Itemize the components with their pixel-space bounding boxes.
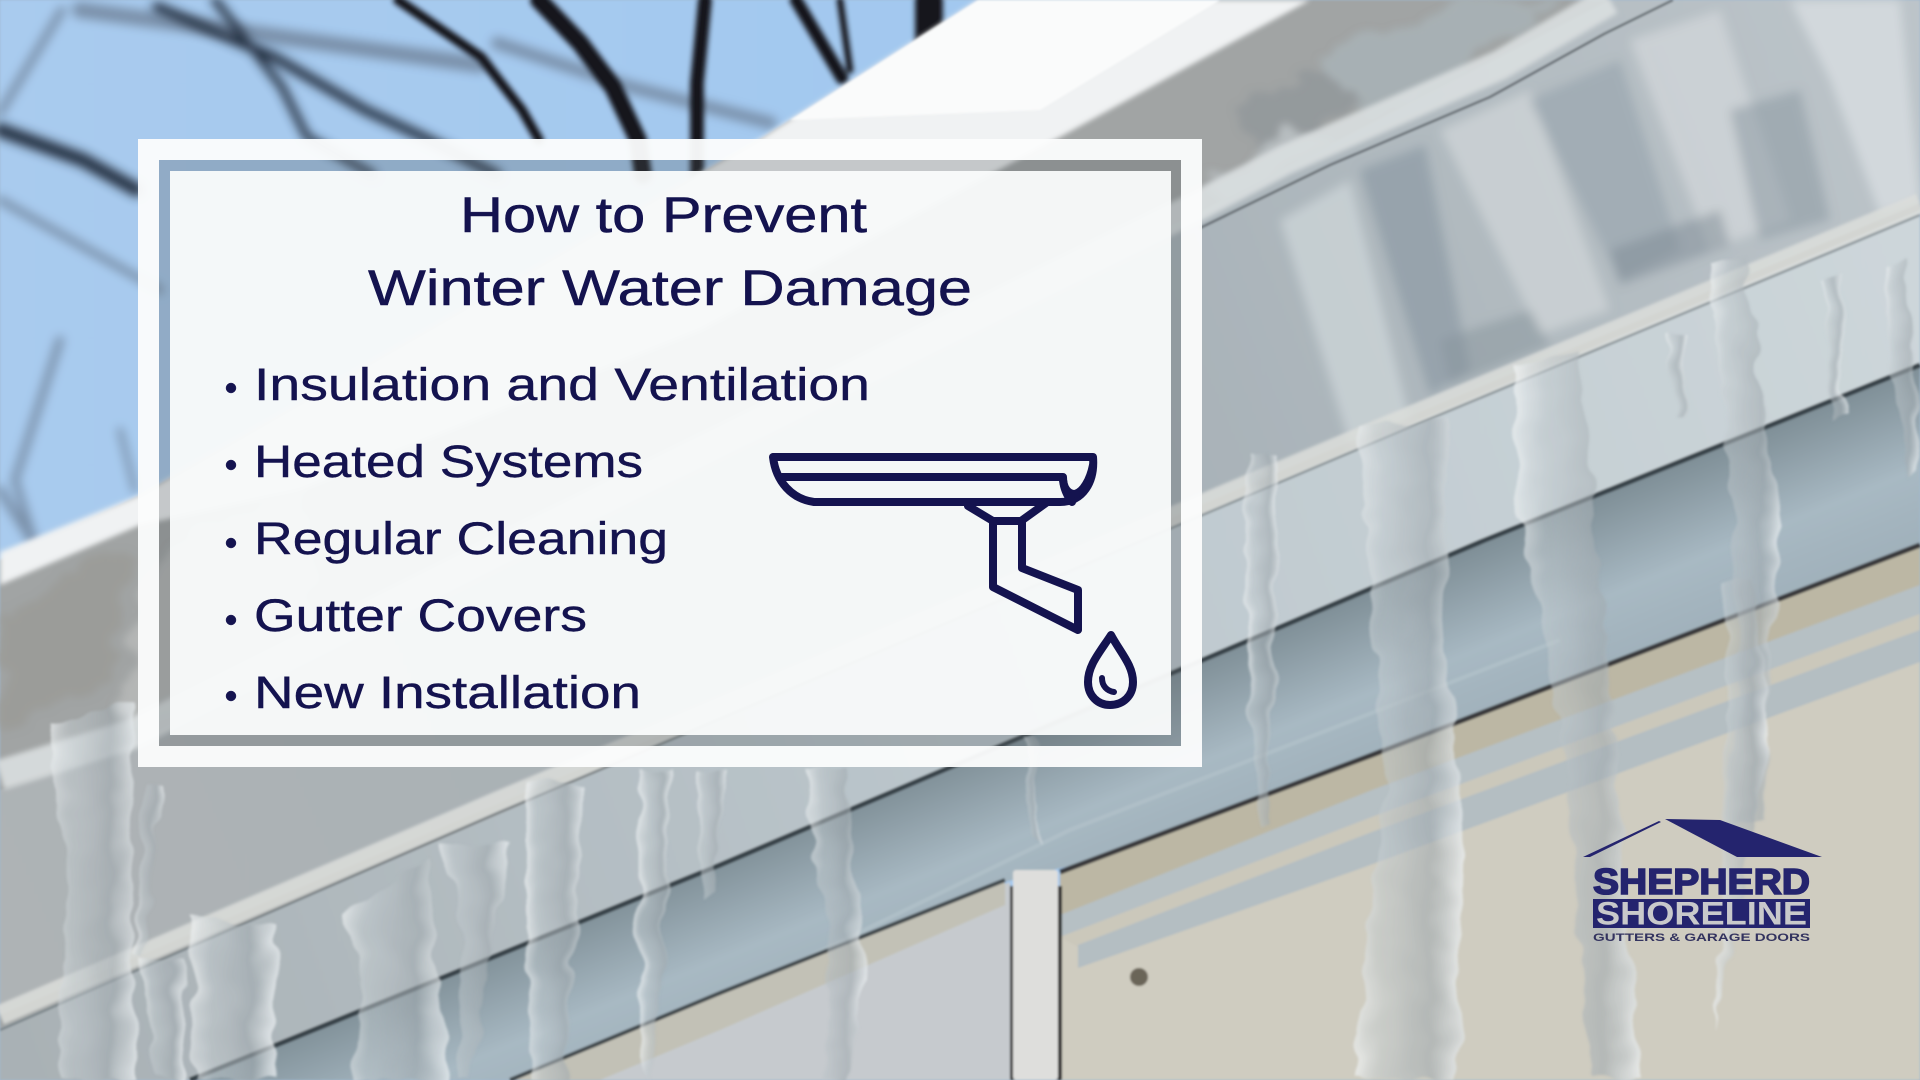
bullet list: Insulation and Ventilation	[254, 359, 870, 410]
panel: translucent white frame	[138, 139, 1202, 767]
panel: content background	[170, 171, 1171, 735]
icon: gutter with downspout	[773, 457, 1093, 630]
logo wordmark: SHEPHERD	[1593, 861, 1810, 902]
logo wordmark: GUTTERS & GARAGE DOORS	[1593, 932, 1810, 944]
icicles hanging from the gutter	[49, 257, 1920, 1080]
logo wordmark	[1593, 861, 1810, 944]
bullet list	[226, 359, 870, 718]
logo: Shepherd Shoreline	[1583, 819, 1822, 944]
title: Winter Water Damage	[368, 260, 972, 316]
logo wordmark: SHORELINE	[1596, 896, 1807, 932]
title	[368, 187, 972, 316]
title: How to Prevent	[460, 187, 867, 243]
panel: frame shadow band	[159, 160, 1181, 746]
bullet list: Regular Cleaning	[254, 513, 668, 564]
bullet list: New Installation	[254, 667, 641, 718]
bullet list: Gutter Covers	[254, 590, 587, 641]
bullet list: Heated Systems	[254, 436, 643, 487]
logo roof	[1583, 819, 1822, 857]
icon: water drop	[1088, 635, 1133, 705]
